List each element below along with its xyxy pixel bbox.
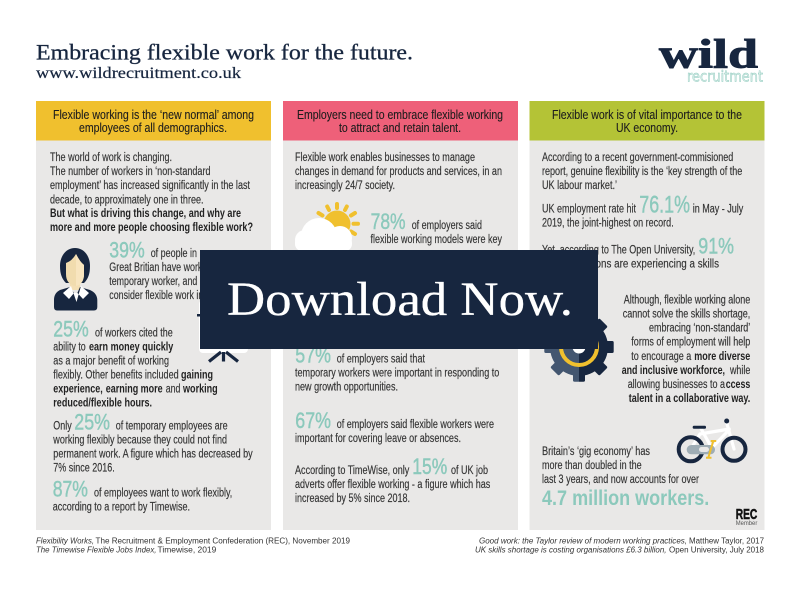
stat: 76.1% bbox=[542, 192, 743, 230]
stat: 15%: adverts offer flexible working - a figure which has bbox=[295, 479, 490, 491]
infographic bbox=[36, 38, 764, 554]
intro text: But what is driving this change, and why are bbox=[50, 208, 241, 220]
stat: 67% bbox=[295, 408, 494, 445]
heading bbox=[36, 101, 271, 140]
stat: 25% of workers: earning more bbox=[106, 384, 163, 396]
stat: 76.1%: 76.1% bbox=[639, 192, 690, 219]
footnotes: right: UK skills shortage is costing organisations £6.3 billion, bbox=[475, 546, 666, 555]
text: skills shortage bbox=[622, 295, 750, 405]
logo: wild recruitment: recruitment bbox=[687, 68, 763, 86]
stat: gig economy: 4.7 million workers. bbox=[542, 487, 709, 510]
panel: UK economy bbox=[530, 101, 764, 530]
stat: 39% bbox=[109, 237, 212, 302]
logo: REC member bbox=[736, 506, 757, 527]
stat: 39%: consider flexible work in bbox=[109, 290, 203, 302]
stat: 67%: 67% bbox=[295, 408, 331, 433]
footnotes: left: Flexibility Works, bbox=[36, 536, 94, 545]
icon: sun and cloud bbox=[295, 204, 358, 254]
heading: Flexible work is of vital importance to the bbox=[552, 107, 742, 122]
stat: 78%: flexible working models were key bbox=[370, 234, 502, 246]
stat: 76.1%: 2019, the joint-highest on record. bbox=[542, 218, 674, 230]
stat: 25% of temporary employees: permanent work. A figure which has decreased by bbox=[53, 448, 253, 460]
stat: 15%: of UK job bbox=[451, 465, 488, 477]
stat: 67%: of employers said flexible workers were bbox=[337, 419, 494, 431]
intro text: According to a recent government-commisioned bbox=[542, 152, 733, 164]
stat: 78%: of employers said bbox=[412, 220, 482, 232]
stat: 57%: temporary workers were important in responding to bbox=[295, 368, 499, 380]
stat: 76.1%: UK employment rate hit bbox=[542, 204, 637, 216]
heading: to attract and retain talent. bbox=[339, 120, 461, 135]
stat: 15%: 15% bbox=[412, 454, 447, 479]
stat: 15% bbox=[295, 454, 490, 505]
stat: 91%: 91% bbox=[698, 234, 734, 259]
stat: 57%: of employers said that bbox=[337, 354, 426, 366]
stat: 57% bbox=[295, 343, 499, 394]
stat: 25% of workers: reduced/flexible hours. bbox=[53, 398, 152, 410]
intro text: The world of work is changing. bbox=[50, 152, 172, 164]
stat: 76.1%: in May - July bbox=[693, 204, 743, 216]
logo: wild recruitment bbox=[659, 31, 763, 86]
text: skills shortage: allowing businesses to a bbox=[628, 379, 725, 391]
panel: employers bbox=[283, 101, 518, 530]
text: skills shortage: Although, flexible working alone bbox=[624, 295, 750, 307]
text: skills shortage: ccess bbox=[726, 379, 750, 391]
intro text bbox=[50, 152, 253, 234]
text: skills shortage: forms of employment will help bbox=[631, 337, 750, 349]
stat: 67%: important for covering leave or absences. bbox=[295, 433, 461, 445]
stat: 57%: 57% bbox=[295, 343, 331, 368]
title: Embracing flexible work for the future. bbox=[36, 40, 413, 64]
stat: 25% of workers bbox=[53, 317, 218, 410]
stat: 25% of temporary employees: 25% bbox=[74, 409, 110, 434]
text: skills shortage: to encourage a bbox=[631, 351, 692, 363]
stat: 25% of workers: ability to bbox=[53, 342, 86, 354]
stat: gig economy: Britain’s ‘gig economy’ has bbox=[542, 446, 650, 458]
intro text: changes in demand for products and services, in an bbox=[295, 166, 502, 178]
title block bbox=[36, 40, 413, 82]
stat: 25% of workers: 25% bbox=[53, 317, 89, 342]
stat: 78%: 78% bbox=[371, 209, 406, 234]
icon: gear bbox=[544, 312, 614, 382]
stat: 87% bbox=[53, 477, 232, 514]
stat: 87%: of employees want to work flexibly, bbox=[94, 488, 232, 500]
intro text: more and more people choosing flexible work? bbox=[50, 222, 253, 234]
stat: 39%: of people in bbox=[151, 248, 197, 260]
stat: 25% of workers: working bbox=[182, 384, 218, 396]
stat: 57%: new growth opportunities. bbox=[295, 382, 398, 394]
panel: new normal bbox=[36, 101, 271, 530]
footnotes: right: Open University, July 2018 bbox=[669, 546, 765, 555]
text: skills shortage: talent in a collaborative way. bbox=[629, 393, 750, 405]
icon: easel bbox=[197, 300, 248, 362]
stat: 78% bbox=[370, 209, 502, 246]
stat: 15%: increased by 5% since 2018. bbox=[295, 493, 410, 505]
stat: 39%: Great Britian have worked bbox=[109, 262, 212, 274]
stat: 25% of temporary employees: of temporary employees are bbox=[116, 420, 228, 432]
heading: Flexible working is the ‘new normal’ among bbox=[53, 107, 254, 122]
intro text: UK labour market.’ bbox=[542, 180, 617, 192]
stat: 87%: according to a report by Timewise. bbox=[53, 502, 190, 514]
stat: 25% of workers: earn money quickly bbox=[89, 342, 174, 354]
text: skills shortage: more diverse bbox=[694, 351, 750, 363]
icon: person bbox=[54, 248, 97, 310]
stat: gig economy: last 3 years, and now accounts for over bbox=[542, 474, 699, 486]
website: www.wildrecruitment.co.uk bbox=[36, 65, 241, 82]
heading: employees of all demographics. bbox=[79, 120, 227, 135]
stat: 25% of temporary employees bbox=[53, 409, 253, 474]
text: skills shortage: embracing ‘non-standard’ bbox=[649, 323, 750, 335]
stat: 25% of workers: flexibly. Other benefits included bbox=[53, 369, 179, 381]
stat: gig economy bbox=[542, 446, 709, 510]
stat: 25% of workers: experience, bbox=[53, 384, 103, 396]
heading bbox=[530, 101, 764, 140]
logo: REC member: REC bbox=[736, 506, 757, 523]
stat: 91% bbox=[542, 234, 734, 271]
intro text bbox=[542, 152, 742, 192]
banner: download now bbox=[200, 250, 598, 349]
intro text bbox=[295, 152, 502, 192]
banner: download now: Download Now. bbox=[227, 273, 573, 326]
stat: 25% of temporary employees: Only bbox=[53, 420, 72, 432]
footnotes: right bbox=[475, 536, 765, 555]
heading bbox=[283, 101, 518, 140]
footnotes: right: Good work: the Taylor review of modern working practices, bbox=[479, 536, 687, 545]
intro text: increasingly 24/7 society. bbox=[295, 180, 395, 192]
text: skills shortage: cannot solve the skills shortage, bbox=[623, 309, 750, 321]
stat: 25% of workers: gaining bbox=[181, 369, 213, 381]
stat: 25% of temporary employees: working flexibly because they could not find bbox=[53, 434, 227, 446]
footnotes: left: The Timewise Flexible Jobs Index, bbox=[36, 546, 156, 555]
text: skills shortage: while bbox=[729, 365, 750, 377]
stat: 39%: 39% bbox=[109, 237, 145, 262]
stat: gig economy: more than doubled in the bbox=[542, 460, 642, 472]
stat: 25% of workers: and bbox=[166, 384, 180, 396]
stat: 15%: According to TimeWise, only bbox=[295, 465, 409, 477]
logo: REC member: Member bbox=[736, 521, 757, 527]
heading: UK economy. bbox=[616, 120, 678, 135]
intro text: employment’ has increased significantly in the last bbox=[50, 180, 251, 192]
stat: 25% of temporary employees: 7% since 2016. bbox=[53, 462, 115, 474]
stat: 25% of workers: of workers cited the bbox=[95, 328, 173, 340]
logo: wild recruitment: wild bbox=[659, 31, 758, 77]
footnotes: left: Timewise, 2019 bbox=[158, 546, 217, 555]
intro text: The number of workers in ‘non-standard bbox=[50, 166, 210, 178]
footnotes: left: The Recruitment & Employment Confederation (REC), November 2019 bbox=[96, 536, 351, 545]
text: skills shortage: and inclusive workforce, bbox=[622, 365, 725, 377]
stat: 91%: of organisations are experiencing a skills bbox=[542, 259, 719, 271]
intro text: decade, to approximately one in three. bbox=[50, 194, 204, 206]
stat: 87%: 87% bbox=[53, 477, 88, 502]
footnotes: right: Matthew Taylor, 2017 bbox=[689, 536, 765, 545]
intro text: report, genuine flexibility is the ‘key strength of the bbox=[542, 166, 742, 178]
footnotes: left bbox=[36, 536, 351, 555]
intro text: Flexible work enables businesses to manage bbox=[295, 152, 475, 164]
stat: 39%: temporary worker, and bbox=[109, 276, 197, 288]
icon: bicycle bbox=[679, 418, 746, 461]
stat: 91%: Yet, according to The Open University, bbox=[542, 245, 695, 257]
heading: Employers need to embrace flexible working bbox=[297, 107, 503, 122]
stat: 25% of workers: as a major benefit of working bbox=[53, 356, 169, 368]
